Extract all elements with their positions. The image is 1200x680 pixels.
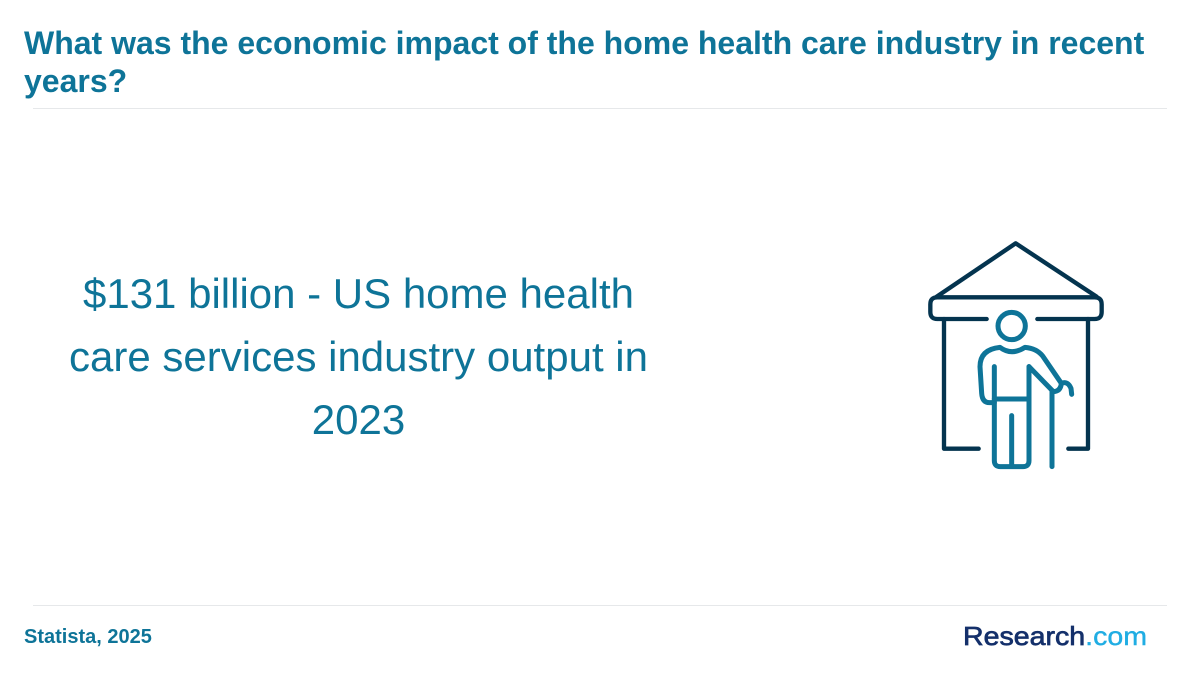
source: Statista, 2025 <box>24 626 152 648</box>
icon: elderly person with cane inside a house <box>928 241 1104 470</box>
statistic text <box>69 270 648 443</box>
title: What was the economic impact of the home health care industry in recent years? <box>24 25 1144 99</box>
icon: elderly person <box>980 312 1072 467</box>
statistic text: 2023 <box>312 396 405 443</box>
icon: house outline <box>930 243 1102 449</box>
statistic text: care services industry output in <box>69 333 648 380</box>
statistic text: $131 billion - US home health <box>83 270 634 317</box>
logo: Research.com: Research .com <box>963 621 1147 651</box>
